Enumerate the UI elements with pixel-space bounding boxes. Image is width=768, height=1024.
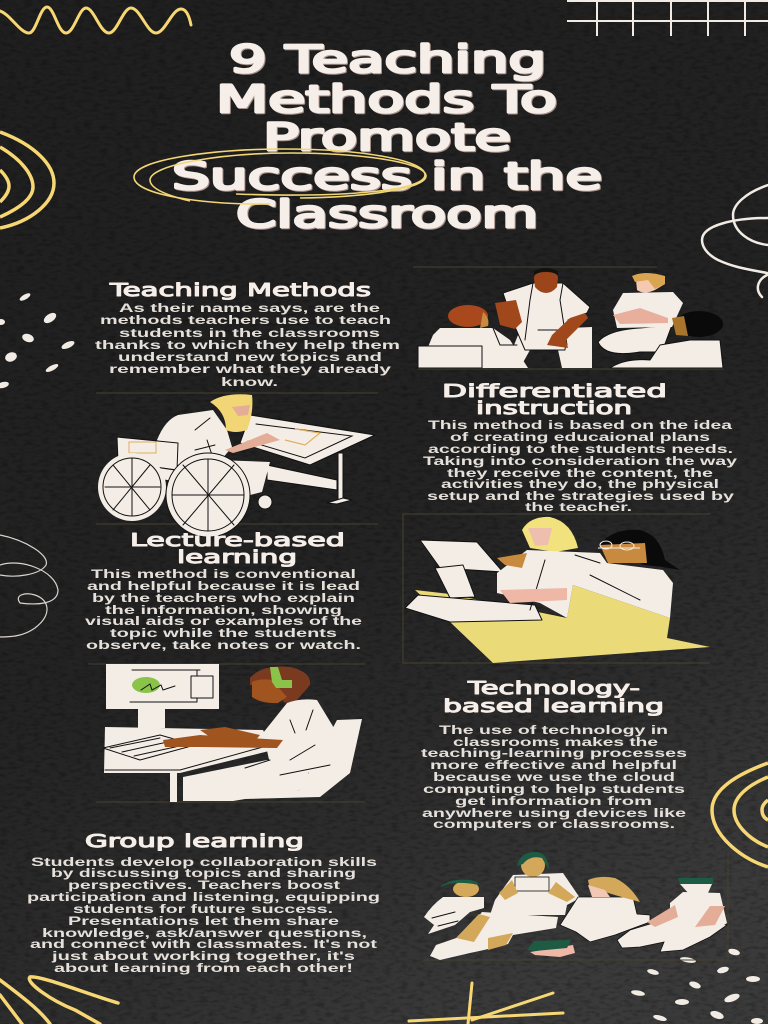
thin illustration frames <box>88 267 728 960</box>
books <box>527 940 575 957</box>
heading: differentiated instruction: instruction <box>476 398 632 419</box>
illustration: children reading together <box>424 852 727 960</box>
heading: differentiated instruction <box>442 381 667 419</box>
text: technology-based learning: more effective and helpful <box>430 758 677 772</box>
text: technology-based learning: anywhere using devices like <box>422 806 687 820</box>
left seated person <box>418 305 528 368</box>
text: technology-based learning: classrooms makes the <box>453 735 658 749</box>
illustration: two students at a computer <box>405 517 710 663</box>
text: group learning: Presentations let them share <box>68 914 340 928</box>
title: 9 Teaching <box>229 38 546 81</box>
heading: technology-based learning: Technology- <box>466 678 640 699</box>
text: teaching methods: methods teachers use to teach <box>100 313 391 327</box>
text: group learning: students for future success. <box>73 902 333 916</box>
text: differentiated instruction: of creating educaional plans <box>450 430 711 444</box>
heading: technology-based learning: based learning <box>443 696 664 717</box>
illustration: student with headphones at computer <box>103 664 362 802</box>
text: teaching methods: remember what they already <box>109 362 392 376</box>
text: differentiated instruction: This method is based on the idea <box>428 418 733 432</box>
white grid doodle <box>567 0 768 36</box>
text: group learning: and connect with classmates. It's not <box>30 937 377 951</box>
yellow hand-drawn ellipse around Success <box>134 149 426 204</box>
text: differentiated instruction: the teacher. <box>525 500 632 514</box>
heading: group learning: Group learning <box>85 831 304 852</box>
middle girl <box>560 877 650 942</box>
title: Promote <box>263 116 511 159</box>
yellow scribble doodle bottom left <box>0 977 118 1024</box>
text: teaching methods: know. <box>221 375 278 389</box>
text: differentiated instruction: Taking into consideration the way <box>423 454 738 468</box>
text: technology-based learning <box>421 723 688 831</box>
white scribble doodle left <box>0 535 58 637</box>
heading: lecture-based learning: learning <box>177 547 297 568</box>
text: group learning: Students develop collaboration skills <box>31 855 378 869</box>
heading: lecture-based learning: Lecture-based <box>130 530 345 551</box>
text: differentiated instruction: according to the students needs. <box>428 442 733 456</box>
white swirl doodle right <box>702 185 768 297</box>
text: lecture-based learning <box>85 567 363 652</box>
white flecks left <box>0 292 76 389</box>
text: teaching methods: students in the classrooms <box>119 326 381 340</box>
center child with book <box>430 852 580 960</box>
text: group learning: knowledge, ask/answer questions, <box>42 926 367 940</box>
far right person <box>610 311 723 368</box>
text: technology-based learning: teaching-learning processes <box>421 746 688 760</box>
heading: differentiated instruction: Differentiated <box>442 381 667 402</box>
yellow spiral doodle right <box>712 763 768 867</box>
heading: lecture-based learning <box>130 530 345 568</box>
title <box>172 38 602 236</box>
text: lecture-based learning: by the teachers who explain <box>92 591 355 605</box>
title: Classroom <box>236 193 538 236</box>
white flecks bottom right <box>631 948 763 1024</box>
text: group learning: by discussing topics and sharing <box>51 866 356 880</box>
illustration: student in wheelchair at drafting table <box>98 394 375 537</box>
text: teaching methods: understand new topics and <box>118 350 382 364</box>
text: group learning: perspectives. Teachers boost <box>68 878 340 892</box>
text: lecture-based learning: This method is conventional <box>91 567 356 581</box>
text: group learning: about learning from each other! <box>54 961 353 975</box>
text: teaching methods <box>95 301 400 389</box>
text: group learning: participation and listening, equipping <box>27 890 380 904</box>
text: lecture-based learning: and helpful because it is lead <box>87 579 360 593</box>
heading: technology-based learning <box>443 678 664 717</box>
center person <box>495 268 592 368</box>
text: lecture-based learning: topic while the students <box>110 626 338 640</box>
text: differentiated instruction <box>423 418 738 514</box>
text: differentiated instruction: they receive the content, the <box>447 466 714 480</box>
text: group learning: just about working together, it's <box>50 949 356 963</box>
right person with crossed arms <box>598 273 683 354</box>
text: technology-based learning: get information from <box>455 794 652 808</box>
left child <box>424 880 484 934</box>
text: technology-based learning: computing to help students <box>423 782 686 796</box>
text: lecture-based learning: the information, showing <box>105 603 342 617</box>
heading: teaching methods: Teaching Methods <box>108 280 371 301</box>
text: differentiated instruction: setup and the strategies used by <box>427 489 735 503</box>
illustration: group discussion <box>418 268 723 368</box>
yellow spiral doodle left <box>0 132 54 228</box>
text: teaching methods: thanks to which they help them <box>95 338 400 352</box>
title: Methods To <box>216 78 557 121</box>
text: lecture-based learning: visual aids or examples of the <box>85 614 363 628</box>
text: technology-based learning: The use of technology in <box>439 723 668 737</box>
text: technology-based learning: computers or classrooms. <box>433 817 675 831</box>
right boy <box>617 878 727 952</box>
text: group learning <box>27 855 380 975</box>
title: Success in the <box>172 155 602 198</box>
text: differentiated instruction: activities they do, the physical <box>441 477 719 491</box>
yellow zigzag doodle <box>0 7 191 33</box>
text: technology-based learning: because we use the cloud <box>433 770 675 784</box>
text: lecture-based learning: observe, take notes or watch. <box>86 638 361 652</box>
yellow star doodle bottom <box>409 983 563 1024</box>
text: teaching methods: As their name says, are the <box>119 301 381 315</box>
